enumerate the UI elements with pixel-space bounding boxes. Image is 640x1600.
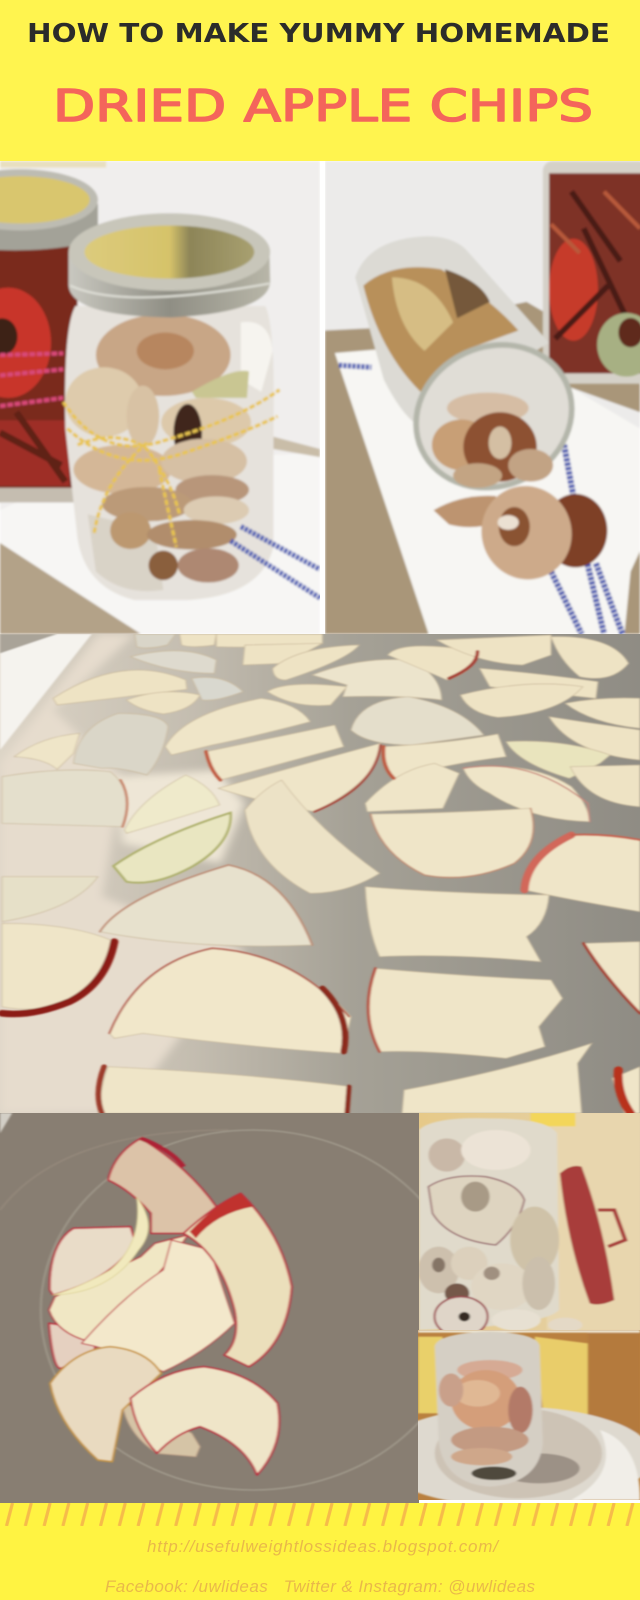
far slices <box>53 634 640 807</box>
photo: jar on saucer <box>418 1330 640 1500</box>
horizontal jar <box>355 236 595 513</box>
photo: jars with tied twine <box>0 161 320 634</box>
middle slices <box>2 698 640 1113</box>
dried slices <box>49 1138 292 1475</box>
towel <box>335 347 640 634</box>
upright red jar <box>543 161 640 384</box>
photo: apple slices on baking tray <box>0 634 640 1113</box>
lid <box>69 249 270 317</box>
photo: dried red apple rings on grey plate <box>0 1113 419 1503</box>
dried chips <box>65 314 251 583</box>
towel stripes <box>231 527 320 598</box>
mason jar <box>435 1332 543 1487</box>
saucer <box>376 1407 640 1507</box>
title: dried apple chips: DRIED APPLE CHIPS <box>53 81 593 132</box>
photo: glass jar with red lid <box>419 1113 640 1330</box>
website url: http://usefulweightlossideas.blogspot.com/ <box>147 1537 500 1556</box>
heading: how to make: HOW TO MAKE YUMMY HOMEMADE <box>27 19 610 49</box>
footer band <box>0 1503 640 1600</box>
twine <box>63 390 280 547</box>
diagonal stripe band <box>0 1503 640 1526</box>
red skins <box>2 652 640 1113</box>
red lid <box>560 1166 625 1304</box>
jar <box>419 1118 559 1330</box>
front jar <box>63 213 280 600</box>
social handles: Facebook: /uwlideas Twitter & Instagram: @uwlideas <box>105 1577 536 1596</box>
spilled chips <box>434 473 607 592</box>
jar chips <box>418 1130 582 1337</box>
photo: jar on its side spilling chips <box>325 161 640 634</box>
back jar <box>0 169 98 502</box>
header band <box>0 0 640 161</box>
